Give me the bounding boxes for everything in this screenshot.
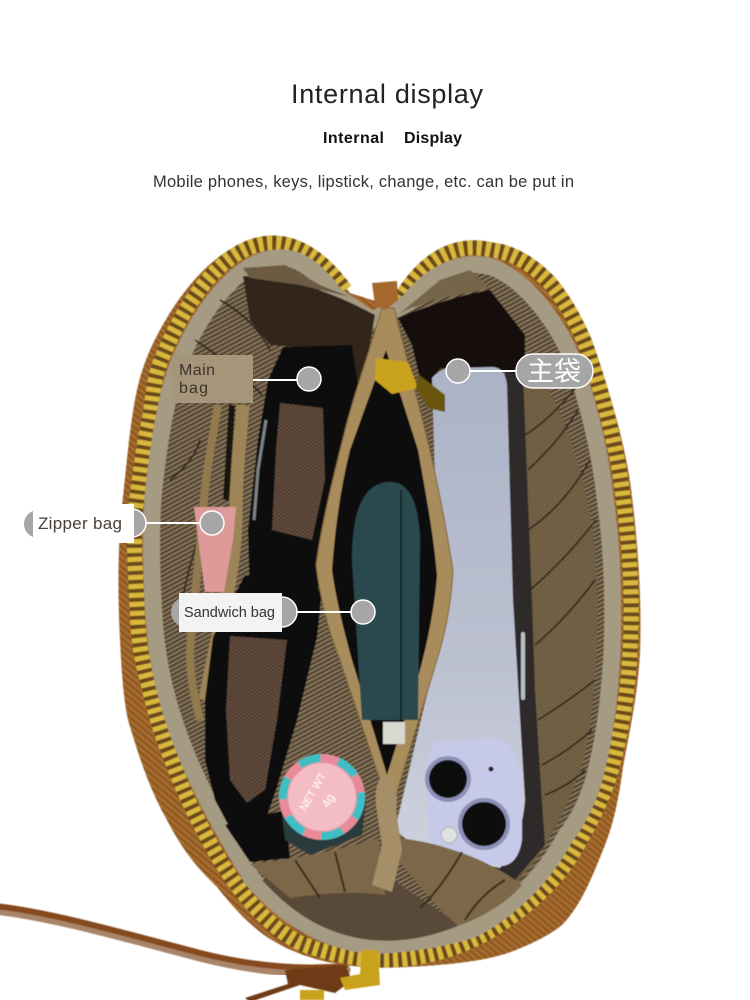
lipstick label: 4g — [319, 791, 337, 810]
subheading — [323, 130, 462, 147]
phone back — [395, 367, 525, 868]
sunglasses lower lens — [226, 636, 287, 803]
title: Internal display — [291, 79, 484, 109]
right lining — [505, 360, 597, 888]
top zipper pull — [375, 358, 445, 412]
pocket zipper tape — [316, 308, 453, 795]
subheading: Internal — [323, 130, 384, 147]
banknote — [194, 507, 236, 592]
bottom right flap — [395, 838, 522, 926]
zipper teeth — [134, 243, 631, 960]
phone side band — [490, 372, 545, 880]
lipstick — [279, 754, 366, 855]
lipstick cap — [288, 763, 356, 831]
bottom zipper pull — [340, 950, 380, 990]
description text: Mobile phones, keys, lipstick, change, etc. can be put in — [153, 173, 574, 191]
label: zipper bag: Zipper bag — [38, 514, 122, 533]
camera module — [428, 737, 522, 866]
lipstick label — [298, 771, 345, 822]
wrist strap — [0, 906, 345, 971]
upper left dark lining — [243, 276, 375, 400]
bag: open pouch — [118, 238, 641, 1000]
sunglasses lower frame — [205, 575, 322, 832]
zipper pocket bands — [190, 405, 243, 720]
flap stripes — [295, 852, 505, 920]
phone — [395, 367, 545, 880]
upper left tape shadow — [243, 265, 350, 297]
label: main bag — [172, 355, 321, 403]
label: main bag: bag — [179, 380, 208, 397]
teal case — [352, 482, 420, 720]
zipper knot — [372, 775, 402, 892]
label: sandwich bag: Sandwich bag — [184, 605, 275, 621]
lining and zipper tape — [152, 258, 613, 945]
lipstick label: NET WT — [298, 771, 329, 813]
label: sandwich bag — [171, 593, 375, 632]
sunglasses temple highlight — [254, 420, 266, 520]
center sandwich pocket — [316, 308, 453, 795]
label: main bag: Main — [179, 362, 215, 379]
back strap tab — [372, 281, 398, 310]
bag bottom interior — [262, 870, 460, 941]
label: main bag Chinese — [446, 354, 593, 388]
phone side button — [521, 632, 525, 700]
upper right dark interior — [398, 290, 525, 400]
label: main bag Chinese: 主袋 — [527, 357, 581, 387]
case seam — [400, 490, 402, 720]
bag outer shell — [118, 238, 641, 968]
floor shadow — [225, 810, 290, 862]
lipstick body — [280, 800, 366, 855]
microphone — [488, 766, 494, 772]
subheading: Display — [404, 130, 462, 147]
label: zipper bag — [24, 504, 224, 543]
strap knot — [245, 965, 352, 1000]
sunglasses upper frame — [248, 345, 360, 600]
lipstick rim — [279, 754, 365, 840]
bottom left flap — [250, 838, 385, 898]
upper right flap — [398, 270, 490, 315]
white bit — [383, 722, 405, 744]
lipstick rim pattern — [283, 758, 361, 836]
sunglasses upper lens — [272, 403, 325, 540]
flash — [441, 827, 457, 843]
pocket opening — [332, 350, 437, 775]
lining wave lines — [170, 300, 596, 795]
lens two — [458, 798, 510, 850]
sunglasses — [205, 345, 360, 862]
lens one — [425, 756, 471, 802]
small gold clasp — [300, 990, 324, 1000]
